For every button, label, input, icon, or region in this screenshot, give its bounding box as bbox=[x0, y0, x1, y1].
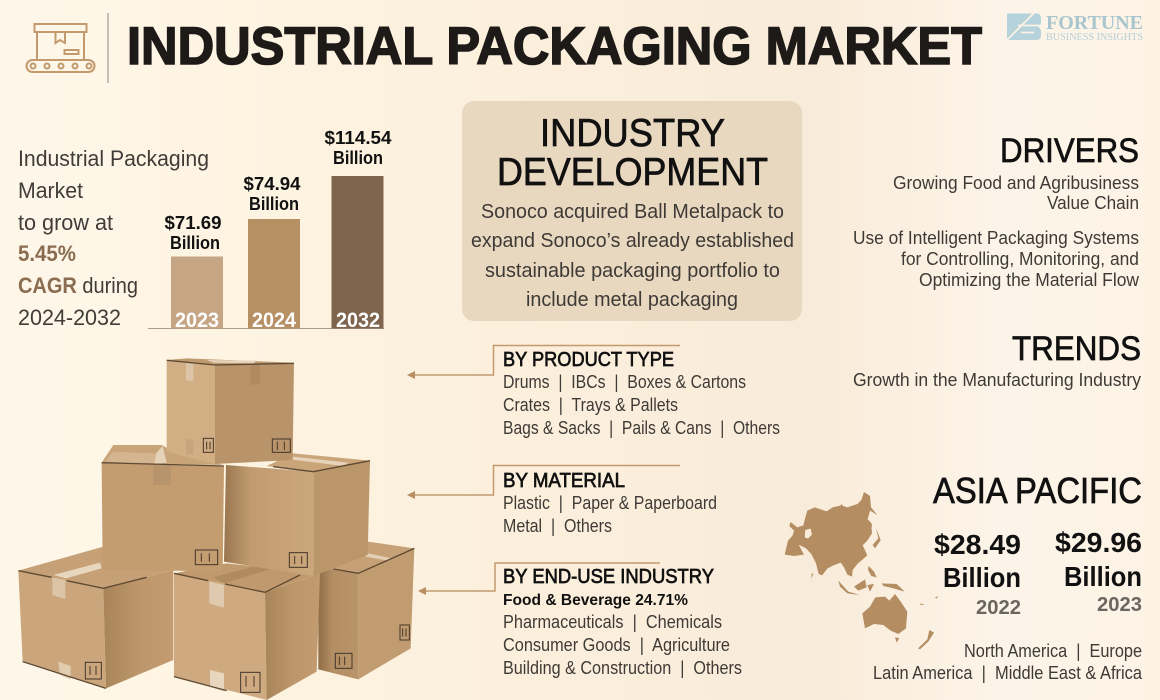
segment: by product type bbox=[407, 346, 780, 438]
text: development body bbox=[471, 201, 794, 311]
bar: 2023: 2023 bbox=[175, 309, 219, 332]
text: CAGR statement bbox=[18, 146, 209, 330]
stat: 2023: $29.96 bbox=[1055, 527, 1142, 558]
box: top bbox=[167, 358, 294, 464]
text: other regions bbox=[873, 641, 1143, 683]
logo: Fortune Business Insights bbox=[1007, 12, 1143, 43]
arrow: product type bbox=[407, 346, 680, 379]
heading: industry development bbox=[497, 112, 768, 194]
bar: 2032: $114.54 bbox=[324, 128, 392, 148]
bar: 2032: 2032 bbox=[336, 309, 380, 332]
section: trends: TRENDS bbox=[1012, 330, 1141, 368]
segment: by end-use industry: BY END-USE INDUSTRY bbox=[503, 566, 714, 588]
section: drivers: Optimizing the Material Flow bbox=[919, 270, 1140, 290]
section: drivers: Use of Intelligent Packaging Systems bbox=[853, 228, 1139, 248]
text: development body: Sonoco acquired Ball Metalpack to bbox=[481, 201, 784, 223]
text: other regions: North America | Europe bbox=[964, 641, 1142, 661]
bar: 2023: Billion bbox=[170, 233, 220, 253]
text: other regions: Latin America | Middle East & Africa bbox=[873, 663, 1143, 683]
heading: industry development: DEVELOPMENT bbox=[497, 151, 768, 194]
text: CAGR statement: 2024-2032 bbox=[18, 305, 121, 330]
bar: 2024: $74.94 bbox=[244, 174, 300, 194]
arrow: material bbox=[407, 466, 680, 499]
stat: 2023: Billion bbox=[1064, 561, 1142, 592]
text: CAGR statement: to grow at bbox=[18, 210, 113, 235]
section: drivers: for Controlling, Monitoring, and bbox=[901, 249, 1139, 269]
map: Asia Pacific bbox=[785, 492, 938, 649]
stat: 2022 bbox=[934, 529, 1021, 619]
bar: 2023: $71.69 bbox=[164, 213, 222, 233]
box: bottom middle bbox=[174, 563, 320, 700]
stat: 2022: Billion bbox=[943, 562, 1021, 593]
box: back right bbox=[318, 542, 414, 679]
heading: industry development: INDUSTRY bbox=[540, 112, 725, 155]
segment: by material bbox=[407, 466, 717, 536]
box: middle right bbox=[224, 453, 370, 576]
section: Asia Pacific bbox=[873, 470, 1143, 683]
bar: 2024 bbox=[244, 174, 300, 332]
bar: 2032 bbox=[324, 128, 392, 332]
section: drivers bbox=[853, 132, 1140, 290]
segment: by product type: Bags & Sacks | Pails & Cans | Others bbox=[503, 418, 780, 438]
segment: by product type: BY PRODUCT TYPE bbox=[503, 349, 674, 371]
segment: by material: Metal | Others bbox=[503, 516, 612, 536]
stat: 2023 bbox=[1055, 527, 1142, 616]
section: drivers: Value Chain bbox=[1047, 193, 1139, 213]
title: INDUSTRIAL PACKAGING MARKET bbox=[127, 17, 982, 76]
segment: by product type: Drums | IBCs | Boxes & Cartons bbox=[503, 372, 746, 392]
stat: 2022: 2022 bbox=[976, 597, 1021, 619]
bar chart: market size bbox=[148, 128, 392, 332]
text: development body: include metal packaging bbox=[526, 289, 738, 311]
segment: by material: Plastic | Paper & Paperboard bbox=[503, 493, 717, 513]
segment: by end-use industry: Building & Construction | Others bbox=[503, 658, 742, 678]
section: Asia Pacific: ASIA PACIFIC bbox=[933, 470, 1142, 511]
box: middle left bbox=[102, 445, 224, 572]
segment: by product type: Crates | Trays & Pallets bbox=[503, 395, 678, 415]
stat: 2023: 2023 bbox=[1097, 594, 1142, 616]
bar: 2023 bbox=[164, 213, 223, 332]
image: stacked cardboard boxes bbox=[18, 358, 414, 700]
segment: by end-use industry: Food & Beverage 24.71% bbox=[503, 592, 688, 609]
logo: Fortune Business Insights: FORTUNE bbox=[1046, 12, 1143, 34]
stat: 2022: $28.49 bbox=[934, 529, 1021, 560]
bar: 2024: Billion bbox=[249, 194, 299, 214]
panel: industry development bbox=[462, 101, 802, 321]
section: drivers: Growing Food and Agribusiness bbox=[893, 173, 1139, 193]
text: CAGR statement: Industrial Packaging bbox=[18, 146, 209, 171]
text: development body: sustainable packaging portfolio to bbox=[485, 260, 780, 282]
arrow: end-use bbox=[418, 563, 660, 595]
bar: 2032: Billion bbox=[333, 148, 383, 168]
logo mark bbox=[1007, 13, 1041, 40]
segment: by end-use industry: Pharmaceuticals | Chemicals bbox=[503, 612, 722, 632]
text: CAGR statement: CAGR during bbox=[18, 273, 138, 298]
segment: by end-use industry: Consumer Goods | Agriculture bbox=[503, 635, 730, 655]
logo: Fortune Business Insights: BUSINESS INSIGHTS bbox=[1046, 32, 1143, 43]
segment: by end-use industry bbox=[418, 563, 742, 678]
section: drivers: DRIVERS bbox=[1000, 132, 1139, 170]
bar: 2024: 2024 bbox=[252, 309, 296, 332]
segment: by material: BY MATERIAL bbox=[503, 470, 625, 492]
text: CAGR statement: Market bbox=[18, 178, 83, 203]
section: trends: Growth in the Manufacturing Industry bbox=[853, 370, 1141, 390]
text: CAGR statement: 5.45% bbox=[18, 241, 76, 266]
icon: box on conveyor bbox=[26, 24, 94, 72]
box: bottom left bbox=[18, 547, 173, 688]
text: development body: expand Sonoco’s already established bbox=[471, 230, 794, 252]
section: trends bbox=[853, 330, 1141, 390]
